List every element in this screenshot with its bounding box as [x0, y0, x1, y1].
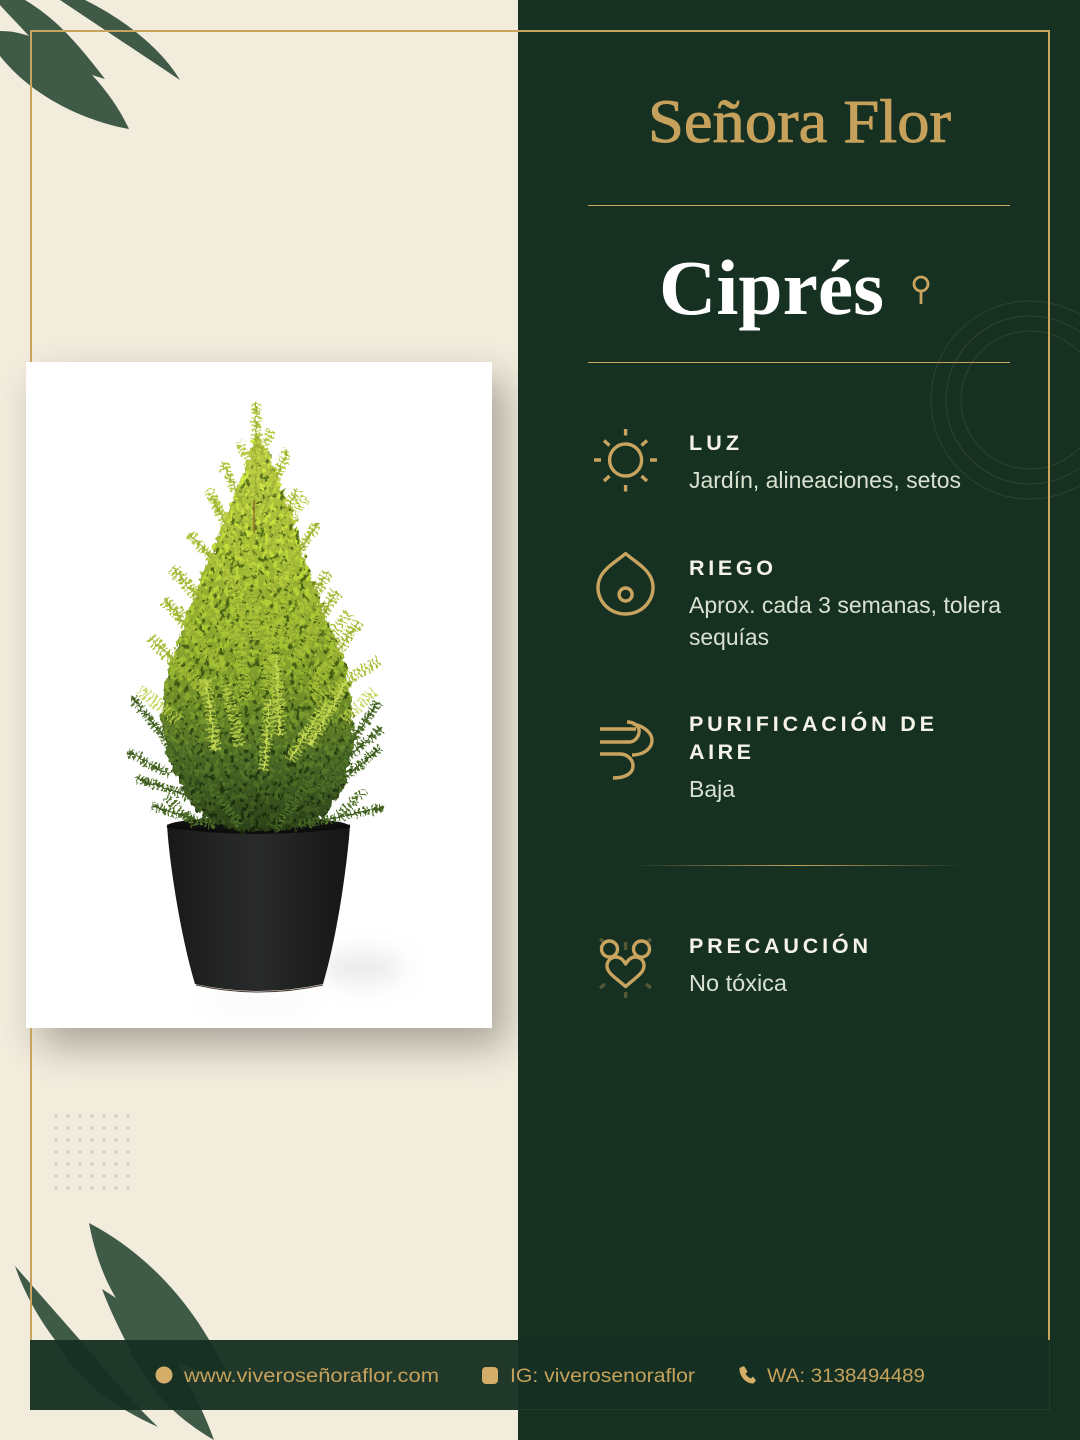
panel: dark green right side [518, 0, 1080, 1440]
text: riego value: Aprox. cada 3 semanas, tolera [689, 592, 1001, 618]
decorative concentric circles [931, 301, 1080, 499]
text: luz value: Jardín, alineaciones, setos [689, 467, 961, 493]
icon: water drop [598, 554, 653, 614]
trunk [253, 500, 255, 533]
label: RIEGO: RIEGO [689, 556, 773, 580]
icon: sun [594, 429, 657, 492]
foliage mass [160, 430, 355, 832]
plant name: Ciprés: Ciprés [659, 244, 884, 331]
pot [167, 817, 350, 992]
footer: instagram: IG: viverosenoraflor [510, 1366, 696, 1387]
icon: heart [600, 939, 651, 998]
pot cast shadow [196, 955, 404, 1006]
label: LUZ: LUZ [689, 431, 739, 455]
text: precaución value: No tóxica [689, 970, 787, 996]
divider bottom [588, 362, 1010, 363]
section: precaución [600, 933, 868, 998]
label: PURIFICACIÓN DE AIRE: AIRE [689, 740, 751, 764]
text: riego value: sequías [689, 624, 769, 650]
lower fronds [128, 697, 382, 828]
icon: pin [914, 277, 928, 304]
text: aire value: Baja [689, 776, 735, 802]
footer: website: www.viveroseñoraflor.com [183, 1366, 439, 1387]
section: purificación de aire [600, 711, 934, 802]
foliage [128, 402, 382, 832]
leaves: top left [0, 0, 180, 129]
upper fronds [128, 402, 382, 828]
white photo background [26, 362, 492, 1028]
label: PURIFICACIÓN DE AIRE: PURIFICACIÓN DE [689, 711, 934, 736]
footer: whatsapp: WA: 3138494489 [767, 1366, 925, 1387]
panel: cream background [0, 0, 518, 1440]
icon: wind [600, 722, 652, 778]
title: Señora Flor: Señora Flor [648, 89, 951, 156]
dot pattern [54, 1114, 130, 1190]
photo shadow [40, 380, 506, 1046]
label: PRECAUCIÓN: PRECAUCIÓN [689, 933, 868, 958]
footer bar [30, 1340, 1050, 1410]
divider top [588, 205, 1010, 206]
leaves: bottom left [15, 1223, 232, 1440]
section: riego [598, 554, 1001, 650]
photo card: potted cypress [26, 362, 492, 1028]
section: luz [594, 429, 961, 493]
divider gradient [630, 865, 965, 866]
